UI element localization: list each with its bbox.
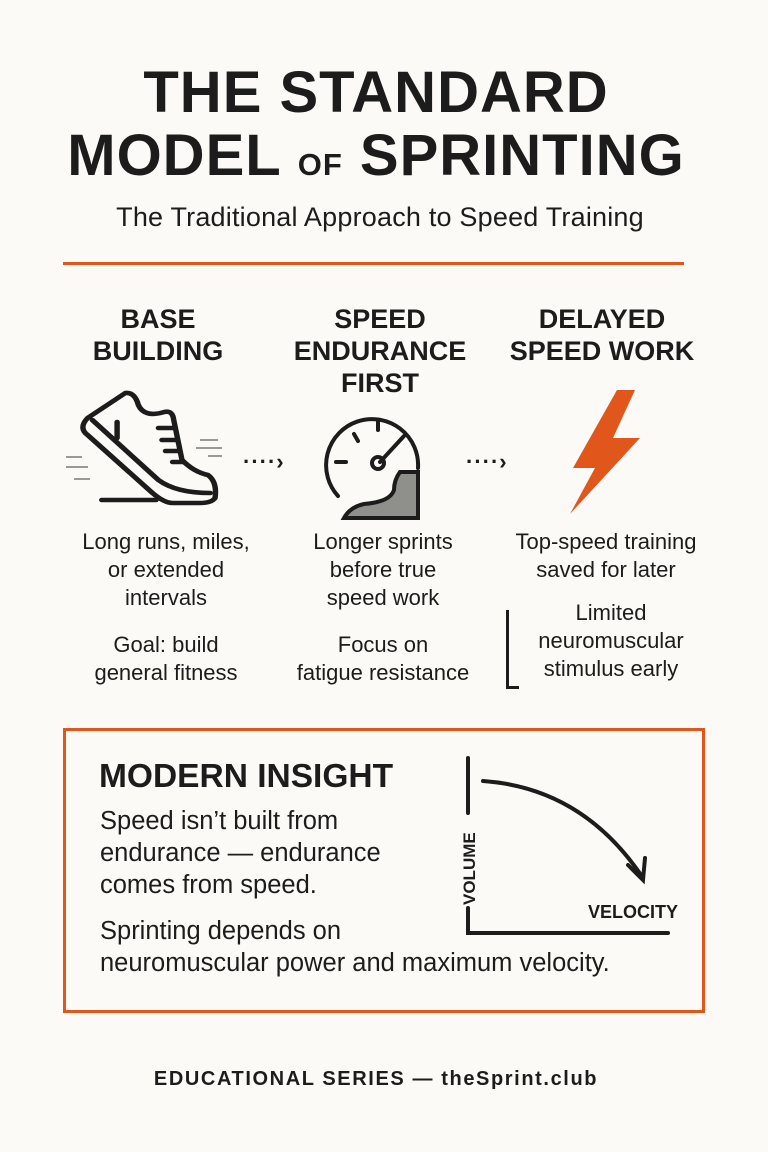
chart: volume vs velocity [460,756,678,935]
text: delayed speed work [515,529,696,681]
panel: modern insight [63,728,705,1013]
insight heading: MODERN INSIGHT [99,758,393,795]
title: MODEL OF SPRINTING [67,123,685,188]
subtitle: The Traditional Approach to Speed Training [116,202,644,232]
text: delayed speed work: Top-speed training [515,529,696,554]
insight text 2: Sprinting depends on [100,917,341,945]
insight text 2 [100,917,610,977]
insight text: Speed isn’t built from [100,807,338,835]
heading: delayed speed work: SPEED WORK [510,336,694,366]
bracket [506,610,519,689]
heading: speed endurance first: FIRST [341,368,419,398]
insight text: endurance — endurance [100,839,381,867]
heading: speed endurance first [294,304,466,398]
footer: EDUCATIONAL SERIES — theSprint.club [154,1068,598,1090]
text: speed endurance: speed work [327,585,439,610]
text: base building: intervals [125,585,207,610]
chart: volume vs velocity: VELOCITY [588,902,678,922]
icon: shoe [66,390,222,506]
title: THE STANDARD [143,60,609,125]
heading: base building [93,304,223,366]
heading: delayed speed work [510,304,694,366]
text: delayed speed work: stimulus early [544,656,678,681]
title [67,60,685,188]
text: speed endurance: Longer sprints [313,529,453,554]
text: base building: or extended [108,557,224,582]
heading: delayed speed work: DELAYED [539,304,665,334]
heading: speed endurance first: ENDURANCE [294,336,466,366]
insight text [100,807,381,899]
text: speed endurance: Focus on [338,632,428,657]
text: base building: Long runs, miles, [82,529,250,554]
text: delayed speed work: neuromuscular [538,628,684,653]
heading: speed endurance first: SPEED [334,304,426,334]
icon: lightning [570,390,640,514]
insight text 2: neuromuscular power and maximum velocity. [100,949,610,977]
text: speed endurance: before true [330,557,436,582]
arrow 1: ····› [243,449,285,474]
insight text: comes from speed. [100,871,317,899]
text: base building [82,529,250,685]
text: base building: general fitness [94,660,238,685]
text: speed endurance: fatigue resistance [297,660,469,685]
icon: speedometer [324,417,420,520]
heading: base building: BASE [120,304,196,334]
text: base building: Goal: build [113,632,219,657]
text: delayed speed work: Limited [576,600,646,625]
chart: volume vs velocity: VOLUME [460,832,479,905]
text: delayed speed work: saved for later [536,557,676,582]
arrow 2: ····› [466,449,508,474]
heading: base building: BUILDING [93,336,223,366]
text: speed endurance [297,529,469,685]
divider [63,262,684,265]
